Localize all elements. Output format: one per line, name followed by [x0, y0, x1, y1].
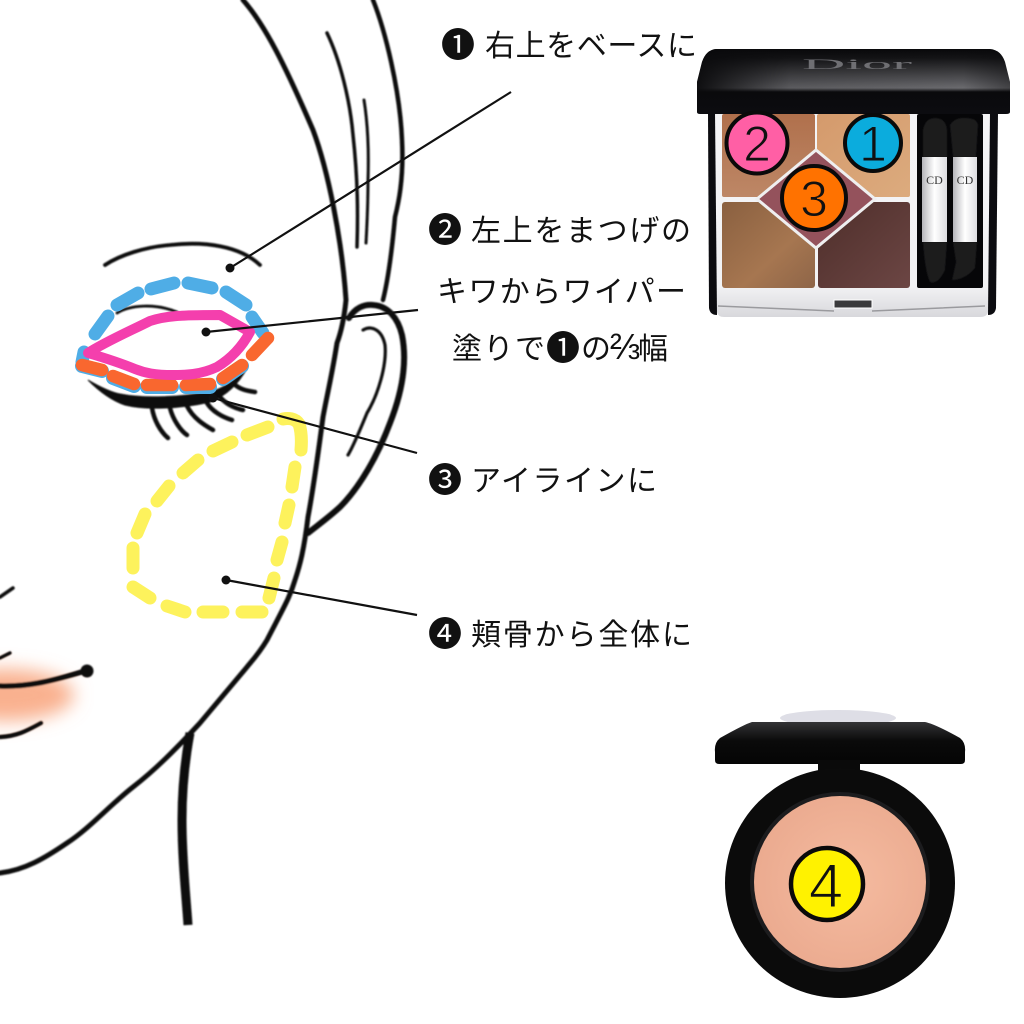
compact body — [725, 768, 955, 998]
compact lid — [715, 722, 965, 764]
step 2 label line 1: ❷ — [428, 212, 462, 250]
pan bottom right — [818, 202, 910, 288]
eyelashes — [152, 383, 255, 438]
step 4 label: ❹ — [428, 616, 462, 654]
eyebrow — [105, 244, 260, 265]
blush powder — [754, 796, 926, 968]
palette side left — [708, 112, 717, 315]
step 2 label line 2: キワからワイパー — [437, 276, 686, 309]
lower lip — [0, 723, 41, 737]
eyelash line — [88, 368, 247, 408]
applicator handle left — [922, 157, 947, 242]
clasp — [834, 300, 872, 308]
pan bottom left — [722, 202, 815, 288]
step 3 label: アイラインに — [471, 465, 657, 498]
badge 1 — [845, 115, 901, 172]
applicator tips — [923, 118, 978, 282]
badge 1: 1 — [859, 116, 887, 172]
palette side right — [988, 112, 998, 315]
pan 1 — [817, 114, 910, 197]
mouth corner — [80, 664, 94, 678]
compact lid highlight — [780, 710, 896, 726]
badge 3 — [782, 166, 846, 230]
pan 2 — [722, 114, 815, 197]
yellow cheek zone — [133, 419, 301, 612]
step 2 label line 3: ❶ — [546, 330, 580, 368]
neck — [182, 733, 190, 925]
hair strand middle — [327, 33, 358, 247]
step 2 label line 1: 左上をまつげの — [471, 215, 691, 248]
leader 3 — [208, 394, 417, 453]
badge 3: 3 — [800, 171, 828, 227]
compact inner ring — [750, 792, 930, 972]
pink eye zone — [88, 315, 250, 375]
blush compact — [715, 710, 965, 998]
pan centre diamond — [757, 150, 875, 248]
palette lid — [697, 49, 1010, 114]
applicator handle right: CD — [957, 173, 974, 187]
palette tray — [715, 112, 990, 317]
step 2 label line 3: 幅 — [638, 333, 668, 366]
mouth blush — [0, 669, 74, 721]
step 2 label line 3: の — [581, 333, 611, 366]
applicator handle right — [953, 157, 977, 242]
tray bottom lines — [718, 306, 985, 311]
leader 2 — [202, 310, 418, 336]
blue dashed eye zone — [82, 283, 263, 387]
leader 4 — [222, 576, 417, 615]
eyeshadow palette — [697, 49, 1010, 317]
mouth line — [0, 671, 85, 686]
face outline and jaw — [0, 0, 346, 873]
badge 2 — [726, 112, 788, 174]
step 4 label: 頬骨から全体に — [471, 619, 692, 652]
badge 4 — [791, 848, 863, 921]
compact hinge — [818, 760, 860, 784]
orange dashed lower eye zone — [82, 338, 268, 385]
ear outer — [308, 305, 404, 533]
step 2 label line 3: ⅔ — [610, 326, 640, 367]
hair strand short — [364, 100, 368, 243]
step 2 label line 3: 塗りで — [452, 333, 545, 366]
hair strand right — [373, 0, 402, 300]
nose lines — [0, 588, 13, 658]
palette lid shading — [697, 49, 1010, 92]
leader 1 — [226, 92, 511, 272]
step 3 label: ❸ — [428, 462, 462, 500]
eyelid crease — [117, 306, 177, 313]
badge 4: 4 — [809, 852, 843, 921]
badge 2: 2 — [743, 116, 771, 172]
Dior logo: Dior — [802, 57, 912, 73]
step 1 label: ❶ — [441, 27, 475, 65]
face line drawing — [0, 0, 404, 925]
applicator handle left: CD — [926, 173, 943, 187]
ear inner — [348, 328, 385, 455]
leader lines — [202, 92, 511, 615]
brush compartment — [917, 114, 983, 288]
instruction text — [428, 27, 697, 654]
step 1 label: 右上をベースに — [485, 30, 697, 63]
